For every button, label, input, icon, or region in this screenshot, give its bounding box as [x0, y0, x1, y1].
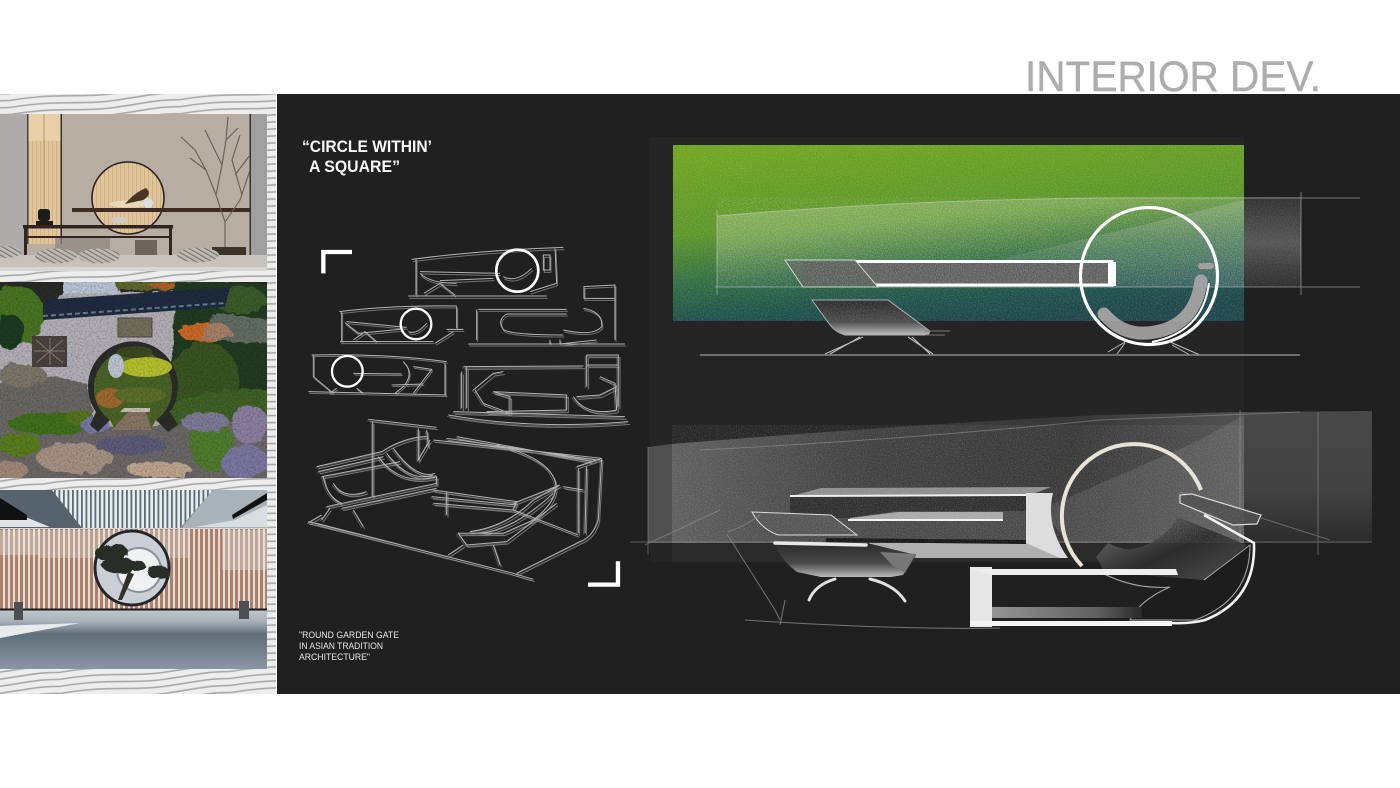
render: side view floor line — [700, 354, 1300, 356]
render: perspective headrest block — [1180, 494, 1261, 525]
render panel: soft dark backdrop behind the views — [650, 137, 1244, 562]
bonsai silhouette — [95, 544, 169, 578]
render: perspective lounge chair — [727, 515, 1000, 628]
render: side view ring seat — [1080, 208, 1218, 355]
heading: circle within a square: A SQUARE” — [309, 158, 400, 176]
crop mark: top left — [323, 252, 352, 273]
caption: round garden gate: "ROUND GARDEN GATE — [299, 630, 399, 641]
crop mark: bottom right — [588, 561, 618, 585]
photo: moon gate in garden wall — [0, 282, 267, 478]
sketch 1: side view with circle — [408, 247, 564, 298]
sketch 4: mirrored side view — [308, 355, 448, 397]
photo: slatted pavilion with circular window — [0, 490, 267, 669]
panel: contour-pattern photo strip — [0, 94, 276, 694]
heading: circle within a square: “CIRCLE WITHIN’ — [302, 138, 432, 156]
render: upper ghost volume — [715, 192, 1360, 295]
moon gate arch — [88, 341, 178, 432]
caption: round garden gate: ARCHITECTURE" — [299, 652, 370, 663]
grain overlay: render panel texture — [672, 145, 1301, 543]
sketch 6: large perspective view — [307, 419, 603, 582]
sketch 5: perspective view small — [447, 355, 630, 427]
render: perspective desk — [752, 487, 1068, 558]
caption: round garden gate: IN ASIAN TRADITION — [299, 641, 383, 652]
render: perspective cream ring — [1062, 444, 1201, 566]
sketch group: concept thumbnails — [307, 247, 630, 585]
panel: dark main board — [277, 94, 1400, 694]
heading: circle within a square — [302, 138, 432, 176]
render: perspective white frame and curve — [970, 515, 1254, 627]
sketch 3: side view without circle — [468, 285, 626, 346]
render: green gradient field — [673, 145, 1244, 321]
sketch 2: small side view with circle — [339, 306, 464, 345]
render: side view chair — [812, 300, 950, 354]
title: INTERIOR DEV. — [1025, 54, 1321, 101]
photo: tea room with round window — [0, 114, 267, 271]
caption: round garden gate — [299, 630, 399, 663]
render: perspective ghost band — [630, 410, 1372, 562]
render: side view desk bar — [785, 260, 1116, 287]
ghost light diagonal — [880, 200, 1244, 287]
